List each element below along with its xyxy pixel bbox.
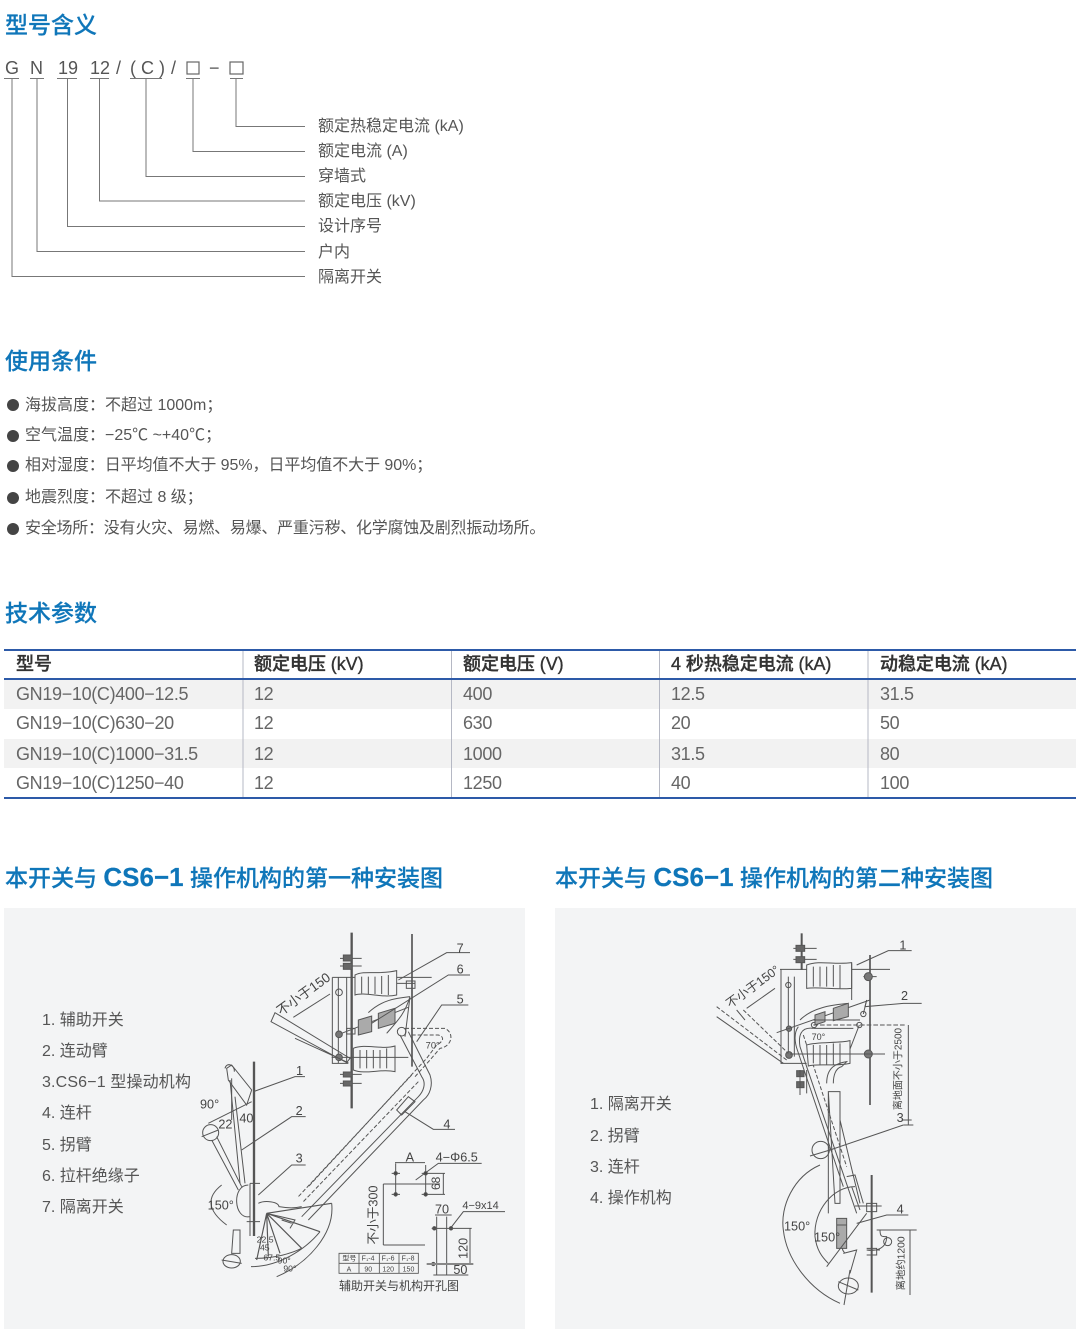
technical drawing 1: 67.5 [263, 1253, 280, 1263]
legend labels: 穿墙式 [318, 168, 366, 185]
technical drawing 1: 120 [457, 1238, 471, 1259]
technical drawing 1: F₁-8 [402, 1256, 415, 1263]
model code diagram: / [171, 58, 176, 78]
model code diagram: / [116, 58, 121, 78]
technical drawing 2: 离地面不小于2500 [891, 1027, 904, 1110]
technical drawing 1: 7 [457, 941, 464, 955]
legend labels: 额定电流 (A) [318, 143, 408, 160]
parameters table: 400 [463, 684, 492, 704]
conditions list: 安全场所：没有火灾、易燃、易爆、严重污秽、化学腐蚀及剧烈振动场所。 [25, 520, 545, 537]
technical drawing 1: A [406, 1150, 415, 1164]
technical drawing 1: 辅助开关与机构开孔图 [339, 1278, 459, 1293]
parameters table: 额定电压 (kV) [254, 654, 364, 674]
panel: second installation [555, 908, 1076, 1329]
technical drawing 1: 4−Φ6.5 [436, 1150, 478, 1164]
conditions list: 相对湿度：日平均值不大于 95%，日平均值不大于 90%； [25, 457, 432, 474]
parameters table: GN19−10(C)1000−31.5 [16, 744, 198, 764]
parameters table: 12 [254, 744, 274, 764]
parts list [42, 1011, 191, 1216]
model code diagram: 19 [58, 58, 78, 78]
technical drawing 1: 90° [283, 1264, 296, 1274]
technical drawing 2 [716, 933, 922, 1306]
technical drawing 2: 3 [897, 1111, 904, 1125]
legend labels: 额定热稳定电流 (kA) [318, 118, 464, 135]
model code diagram: G [5, 58, 19, 78]
heading: first installation diagram: 本开关与 CS6−1 操作机构的第一种安装图 [5, 862, 443, 892]
parameters table: GN19−10(C)630−20 [16, 713, 174, 733]
technical drawing 2: 离地约1200 [895, 1236, 908, 1290]
technical drawing 1: 50 [453, 1263, 467, 1277]
technical drawing 1: 90 [364, 1266, 372, 1273]
legend labels: 额定电压 (kV) [318, 193, 416, 210]
parameters table: 80 [880, 744, 900, 764]
parameters table: 1000 [463, 744, 502, 764]
parts list: 4. 操作机构 [590, 1190, 672, 1207]
conditions list: 空气温度：−25℃ ~+40℃； [25, 427, 221, 444]
technical drawing 1: 4 [443, 1117, 450, 1131]
heading: second installation diagram: 本开关与 CS6−1 操作机构的第二种安装图 [555, 862, 993, 892]
model code diagram: ( C ) [130, 58, 165, 78]
technical drawing 1: 不小于300 [367, 1185, 381, 1245]
parameters table: 40 [671, 773, 691, 793]
legend labels [318, 117, 464, 286]
model code diagram: 12 [90, 58, 110, 78]
technical drawing 2: 1 [899, 938, 906, 952]
conditions list: 地震烈度：不超过 8 级； [25, 489, 203, 506]
technical drawing 1: 3 [296, 1152, 303, 1166]
technical drawing 1: 2 [296, 1104, 303, 1118]
parts list: 5. 拐臂 [42, 1137, 92, 1154]
parts list [590, 1095, 672, 1207]
parts list: 4. 连杆 [42, 1105, 92, 1122]
technical drawing 1: 22.5 [257, 1235, 274, 1245]
parameters table: 12 [254, 773, 274, 793]
technical drawing 1: 1 [296, 1064, 303, 1078]
model code diagram [4, 58, 464, 286]
parts list: 2. 拐臂 [590, 1128, 640, 1145]
technical drawing 1: 150 [403, 1266, 414, 1273]
technical drawing 1: 68 [429, 1176, 443, 1190]
conditions list [7, 396, 545, 537]
technical drawing 1: 70 [435, 1202, 449, 1216]
parts list: 3.CS6−1 型操动机构 [42, 1074, 191, 1091]
parameters table: 1250 [463, 773, 502, 793]
parameters table: 动稳定电流 (kA) [880, 654, 1008, 674]
technical drawing 1: 90° [200, 1097, 219, 1111]
parameters table: 100 [880, 773, 909, 793]
technical drawing 1: 45 [260, 1243, 270, 1253]
technical drawing 1: 6 [457, 962, 464, 976]
technical drawing 1: A [347, 1266, 352, 1273]
technical drawing 2: 150° [784, 1220, 810, 1234]
technical drawing 1: 150° [208, 1198, 234, 1212]
parts list: 1. 隔离开关 [590, 1096, 672, 1113]
technical drawing 1: 不小于150 [274, 970, 333, 1018]
technical drawing 1: 5 [457, 992, 464, 1006]
technical drawing 1: 90° [278, 1255, 291, 1265]
parameters table: 4 秒热稳定电流 (kA) [671, 654, 831, 674]
technical drawing 1: 22 [218, 1117, 232, 1131]
parts list: 6. 拉杆绝缘子 [42, 1168, 140, 1185]
technical drawing 2: 4 [897, 1202, 904, 1216]
parameters table: 12 [254, 684, 274, 704]
parameters table: 12 [254, 713, 274, 733]
technical drawing 1: 4−9x14 [462, 1200, 499, 1212]
parameters table [4, 649, 1076, 799]
parameters table: 31.5 [880, 684, 914, 704]
technical drawing 2: 70° [812, 1032, 826, 1042]
technical drawing 1: 40 [239, 1112, 253, 1126]
technical drawing 1: F₁-6 [382, 1256, 395, 1263]
parts list: 1. 辅助开关 [42, 1012, 124, 1029]
technical drawing 2: 2 [901, 989, 908, 1003]
parameters table: 31.5 [671, 744, 705, 764]
parameters table: 50 [880, 713, 900, 733]
technical drawing 1 [200, 932, 505, 1293]
heading: model meaning: 型号含义 [5, 12, 97, 38]
model code diagram: N [30, 58, 43, 78]
legend labels: 隔离开关 [318, 269, 382, 286]
parameters table: GN19−10(C)1250−40 [16, 773, 184, 793]
parts list: 2. 连动臂 [42, 1043, 108, 1060]
parameters table: 20 [671, 713, 691, 733]
heading: technical parameters: 技术参数 [5, 600, 97, 626]
model code diagram: − [209, 58, 220, 78]
heading: conditions of use: 使用条件 [5, 348, 97, 374]
parts list: 3. 连杆 [590, 1159, 640, 1176]
technical drawing 1: 型号 [342, 1254, 356, 1263]
parts list: 7. 隔离开关 [42, 1199, 124, 1216]
conditions list: 海拔高度：不超过 1000m； [25, 397, 222, 414]
technical drawing 1: 70° [426, 1040, 440, 1050]
technical drawing 1: 120 [382, 1266, 394, 1273]
parameters table: 630 [463, 713, 492, 733]
parameters table: 型号 [16, 654, 52, 674]
parameters table: 12.5 [671, 684, 705, 704]
legend labels: 设计序号 [318, 218, 382, 235]
technical drawing 2: 150° [814, 1231, 840, 1245]
parameters table: 额定电压 (V) [463, 654, 564, 674]
technical drawing 2: 不小于150° [724, 963, 782, 1011]
legend labels: 户内 [318, 244, 350, 261]
parameters table: GN19−10(C)400−12.5 [16, 684, 188, 704]
panel: first installation [4, 908, 525, 1329]
technical drawing 1: F₁-4 [362, 1256, 375, 1263]
